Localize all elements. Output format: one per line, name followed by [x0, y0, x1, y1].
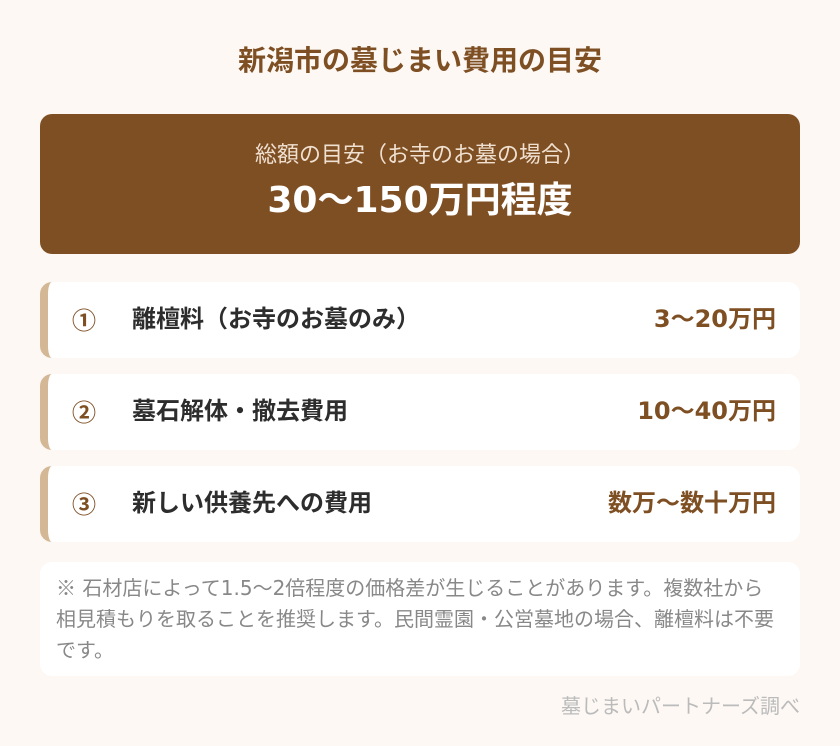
- row number: ②: [72, 393, 96, 428]
- row: new memorial destination: [40, 466, 800, 542]
- title: 新潟市の墓じまい費用の目安: [238, 44, 602, 77]
- row: temple leaving fee: [40, 282, 800, 358]
- row number: ③: [72, 485, 96, 520]
- row amount: 3〜20万円: [654, 305, 776, 333]
- row label: 離檀料（お寺のお墓のみ）: [132, 305, 420, 333]
- row label: 墓石解体・撤去費用: [132, 397, 348, 425]
- row label: 新しい供養先への費用: [132, 489, 372, 517]
- source credit: 墓じまいパートナーズ調べ: [561, 694, 800, 718]
- row: gravestone removal: [40, 374, 800, 450]
- note text: です。: [56, 638, 114, 662]
- row amount: 数万〜数十万円: [608, 489, 776, 517]
- banner amount: 30〜150万円程度: [267, 180, 573, 221]
- row number: ①: [72, 301, 96, 336]
- note text: [56, 572, 774, 662]
- panel: note: [40, 562, 800, 676]
- note text: 相見積もりを取ることを推奨します。民間霊園・公営墓地の場合、離檀料は不要: [56, 607, 774, 631]
- banner label: 総額の目安（お寺のお墓の場合）: [255, 143, 585, 168]
- panel: total estimate banner: [40, 114, 800, 254]
- note text: ※ 石材店によって1.5〜2倍程度の価格差が生じることがあります。複数社から: [56, 572, 763, 601]
- row amount: 10〜40万円: [637, 397, 776, 425]
